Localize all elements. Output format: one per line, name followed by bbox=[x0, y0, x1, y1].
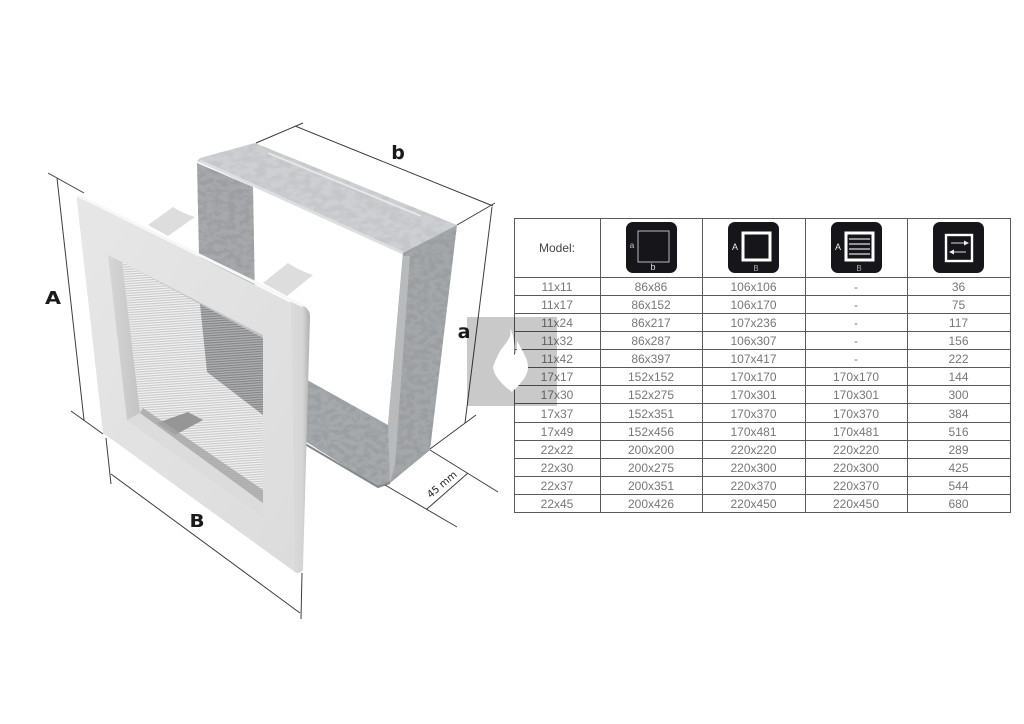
dimension lines bbox=[48, 123, 498, 619]
icon: outer size A B: B bbox=[753, 264, 759, 272]
specification table: Model: bbox=[539, 240, 575, 254]
specification table: 170x481 bbox=[833, 425, 879, 439]
label b: b bbox=[391, 142, 405, 164]
box right face bbox=[388, 225, 457, 483]
specification table: 220x220 bbox=[730, 443, 777, 457]
clip seen through mesh bbox=[157, 412, 203, 435]
box seen through mesh bbox=[200, 304, 263, 415]
specification table: 107x236 bbox=[730, 316, 777, 330]
specification table: 86x287 bbox=[631, 334, 671, 348]
specification table: 17x49 bbox=[541, 425, 573, 439]
clip right bbox=[263, 263, 313, 296]
box bottom inner face bbox=[300, 376, 390, 487]
specification table: 152x152 bbox=[628, 370, 674, 384]
label 45 mm: 45 mm bbox=[425, 469, 459, 501]
specification table: 11x17 bbox=[541, 298, 573, 312]
specification table bbox=[514, 218, 1011, 513]
specification table: 17x37 bbox=[541, 407, 573, 421]
specification table: 11x32 bbox=[541, 334, 573, 348]
dimension b bbox=[256, 123, 495, 225]
lower mesh shadow bbox=[140, 408, 263, 503]
specification table: 22x37 bbox=[541, 479, 573, 493]
specification table: 22x30 bbox=[541, 461, 573, 475]
specification table: 220x450 bbox=[730, 497, 777, 511]
specification table: 107x417 bbox=[730, 352, 777, 366]
specification table: 106x170 bbox=[730, 298, 777, 312]
specification table: 11x42 bbox=[541, 352, 573, 366]
icon: inner size a b bbox=[626, 222, 677, 273]
specification table: 289 bbox=[948, 443, 969, 457]
specification table: 544 bbox=[948, 479, 969, 493]
lower bevel bbox=[127, 413, 263, 516]
specification table: 170x370 bbox=[730, 407, 777, 421]
specification table: 152x351 bbox=[628, 407, 674, 421]
icon: louvred size A B bbox=[831, 222, 882, 273]
specification table: 170x370 bbox=[833, 407, 879, 421]
box top face bbox=[197, 143, 457, 253]
specification table: 170x170 bbox=[730, 370, 777, 384]
specification table: 106x307 bbox=[730, 334, 777, 348]
front grille frame bbox=[77, 196, 310, 573]
specification table: 75 bbox=[952, 298, 965, 312]
specification table: 170x301 bbox=[833, 388, 879, 402]
specification table: 152x456 bbox=[628, 425, 674, 439]
specification table: - bbox=[854, 334, 858, 348]
icon: louvred size A B: B bbox=[856, 264, 861, 272]
mounting clips bbox=[148, 207, 313, 296]
label A: A bbox=[45, 287, 61, 309]
specification table: 86x152 bbox=[631, 298, 671, 312]
watermark: grey square bbox=[467, 317, 557, 406]
specification table: 106x106 bbox=[730, 280, 777, 294]
specification table: 170x301 bbox=[730, 388, 777, 402]
clip left bbox=[148, 207, 195, 236]
specification table: - bbox=[854, 352, 858, 366]
label a: a bbox=[458, 321, 470, 343]
specification table: 220x450 bbox=[833, 497, 879, 511]
specification table: 200x426 bbox=[628, 497, 674, 511]
dimension 45 mm bbox=[385, 450, 498, 527]
icon: inner size a b: a bbox=[629, 240, 634, 250]
specification table: 156 bbox=[948, 334, 969, 348]
box left inner face bbox=[197, 163, 255, 300]
frame top highlight bbox=[79, 196, 303, 306]
specification table: 220x220 bbox=[833, 443, 879, 457]
specification table: 425 bbox=[948, 461, 969, 475]
specification table: 200x351 bbox=[628, 479, 674, 493]
specification table: 516 bbox=[948, 425, 969, 439]
specification table: 17x17 bbox=[541, 370, 573, 384]
specification table: 222 bbox=[948, 352, 969, 366]
specification table: 86x397 bbox=[631, 352, 671, 366]
label B: B bbox=[189, 511, 205, 532]
icon: airflow area arrows bbox=[933, 222, 984, 273]
specification table: 384 bbox=[948, 407, 969, 421]
specification table: 170x170 bbox=[833, 370, 879, 384]
opening bevel bbox=[108, 255, 263, 516]
dimension a bbox=[430, 207, 492, 449]
specification table: 22x45 bbox=[541, 497, 573, 511]
specification table: 22x22 bbox=[541, 443, 573, 457]
specification table: 220x300 bbox=[833, 461, 879, 475]
specification table: - bbox=[854, 316, 858, 330]
box front lip bbox=[200, 161, 403, 253]
specification table: 680 bbox=[948, 497, 969, 511]
specification table: 11x24 bbox=[541, 316, 573, 330]
specification table: - bbox=[854, 280, 858, 294]
specification table: 152x275 bbox=[628, 388, 674, 402]
icon: inner size a b: b bbox=[650, 262, 655, 272]
box right edge strip bbox=[388, 256, 410, 483]
specification table: 170x481 bbox=[730, 425, 777, 439]
mesh bbox=[122, 262, 263, 503]
specification table: 36 bbox=[952, 280, 965, 294]
dimension A bbox=[48, 173, 103, 434]
galvanised mounting box bbox=[197, 143, 457, 487]
specification table: 17x30 bbox=[541, 388, 573, 402]
specification table: - bbox=[854, 298, 858, 312]
icon: louvred size A B: A bbox=[834, 242, 841, 252]
dimension B bbox=[106, 438, 302, 619]
specification table: 86x217 bbox=[631, 316, 671, 330]
specification table: 300 bbox=[948, 388, 969, 402]
icon: outer size A B bbox=[728, 222, 779, 273]
frame face bbox=[77, 196, 295, 572]
specification table: 200x275 bbox=[628, 461, 674, 475]
icon: outer size A B: A bbox=[732, 242, 738, 252]
frame side strip bbox=[290, 300, 310, 573]
watermark: flame bbox=[493, 328, 528, 392]
specification table: 11x11 bbox=[542, 280, 572, 294]
box top slot bbox=[268, 153, 421, 216]
specification table: 144 bbox=[948, 370, 969, 384]
specification table: 86x86 bbox=[635, 280, 667, 294]
specification table: 220x370 bbox=[730, 479, 777, 493]
specification table: 220x300 bbox=[730, 461, 777, 475]
specification table: 200x200 bbox=[628, 443, 674, 457]
specification table: 220x370 bbox=[833, 479, 879, 493]
box bottom lower edge bbox=[305, 444, 390, 487]
specification table: 117 bbox=[949, 316, 968, 330]
